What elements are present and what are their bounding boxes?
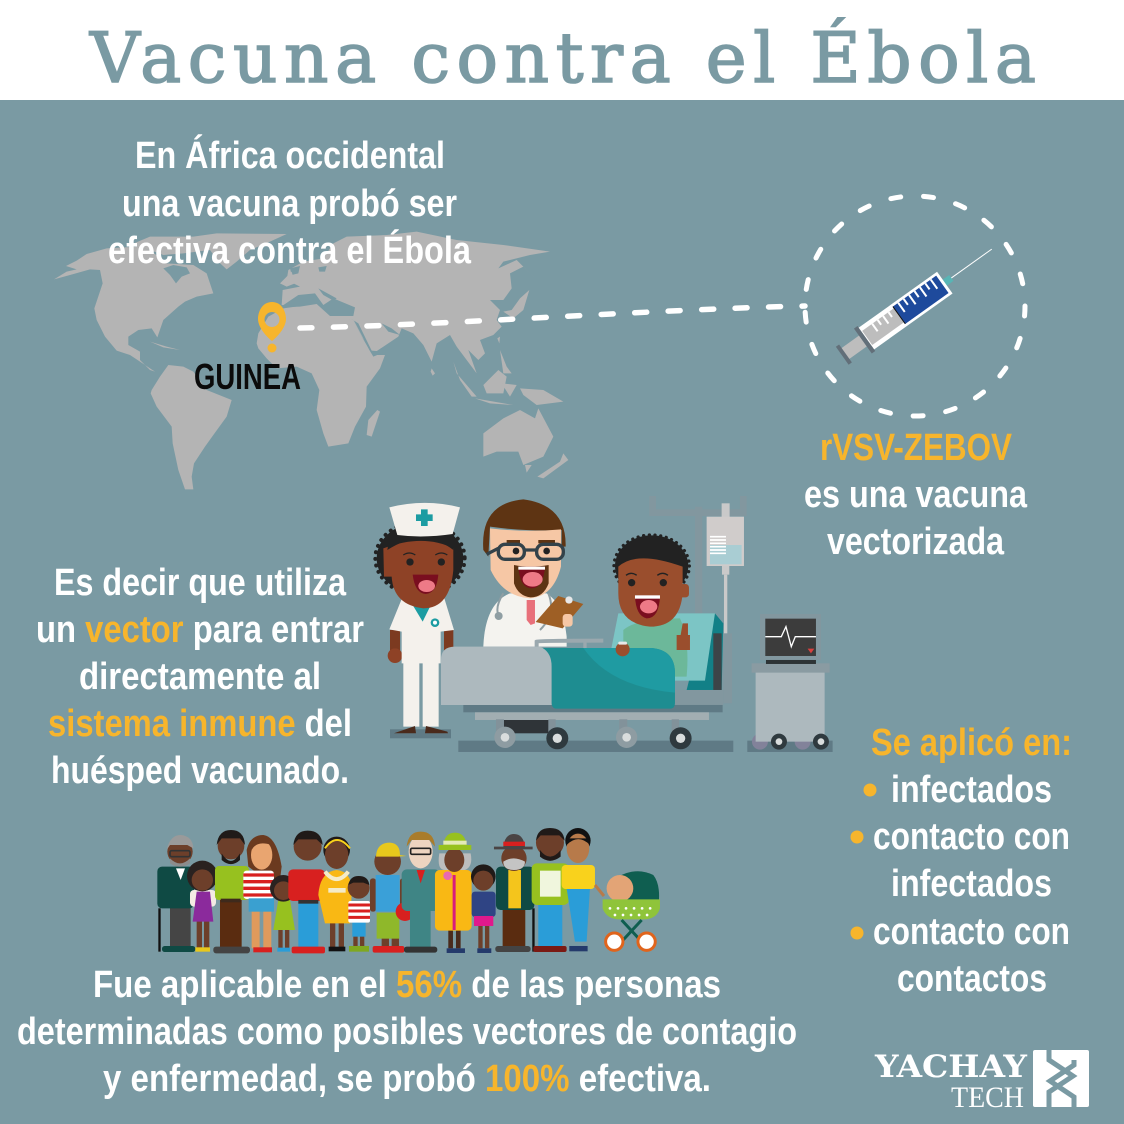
text: se aplicó en: contactos — [897, 958, 1047, 1000]
text: rVSV-ZEBOV: es una vacuna — [804, 474, 1028, 516]
woman in stripes — [243, 835, 282, 952]
illustration: group of people — [157, 828, 660, 953]
heading: Africa occidental: efectiva contra el Ébola — [108, 228, 472, 272]
boy in stripes — [348, 876, 370, 952]
dashed route line — [300, 306, 805, 328]
small girl in green — [270, 875, 297, 952]
text: se aplicó en: contacto con — [873, 816, 1070, 858]
world map — [54, 232, 568, 489]
text: applicability and effectiveness: y enfermedad, se probó 100% efectiva. — [103, 1058, 711, 1100]
text: rVSV-ZEBOV: vectorizada — [827, 521, 1005, 563]
woman in yellow top — [562, 828, 604, 951]
text: applicability and effectiveness — [17, 964, 797, 1100]
hospital illustration — [375, 496, 833, 752]
text: vector explanation: sistema inmune del — [48, 703, 352, 745]
old man with cane — [157, 835, 195, 952]
heading: Africa occidental: una vacuna probó ser — [122, 183, 457, 225]
baby stroller — [603, 871, 660, 950]
text: rVSV-ZEBOV — [804, 427, 1028, 563]
patient — [614, 535, 690, 677]
old woman in yellow coat — [435, 833, 472, 953]
text: vector explanation: Es decir que utiliza — [54, 562, 347, 604]
woman in yellow dress — [318, 837, 352, 951]
icon: dashed circle with syringe — [805, 196, 1025, 416]
monitor — [747, 614, 833, 752]
patient bed head — [605, 613, 732, 703]
text: se aplicó en: infectados — [891, 769, 1052, 811]
text: se aplicó en: infectados — [891, 863, 1052, 905]
heading: Africa occidental: En África occidental — [135, 133, 445, 177]
text: se aplicó en: Se aplicó en: — [871, 722, 1072, 764]
logo: Yachay Tech — [874, 1049, 1089, 1114]
girl in purple — [187, 861, 218, 952]
text: applicability and effectiveness: determinadas como posibles vectores de contagio — [17, 1011, 797, 1053]
doctor — [483, 499, 583, 647]
text: vector explanation: un vector para entrar — [36, 609, 364, 651]
man in green — [213, 830, 250, 953]
logo: Yachay Tech: YACHAY — [874, 1049, 1028, 1085]
title banner — [0, 0, 1124, 100]
girl in navy — [471, 864, 496, 953]
label: Guinea: GUINEA — [194, 356, 301, 397]
text: applicability and effectiveness: Fue aplicable en el 56% de las personas — [93, 964, 721, 1006]
logo: Yachay Tech: TECH — [951, 1081, 1024, 1114]
boy with basketball — [370, 843, 414, 953]
text: se aplicó en: contacto con — [873, 911, 1070, 953]
heading: Africa occidental — [108, 133, 472, 272]
text: se aplicó en — [850, 722, 1072, 1000]
text: vector explanation — [36, 562, 364, 792]
text: vector explanation: huésped vacunado. — [51, 750, 349, 792]
icon: map pin — [258, 302, 286, 352]
man in red — [288, 831, 325, 953]
old man with hat — [494, 834, 535, 952]
title banner: Vacuna contra el Ébola — [89, 17, 1036, 99]
man in green sweater — [532, 828, 569, 952]
text: rVSV-ZEBOV: rVSV-ZEBOV — [820, 427, 1013, 469]
bed — [441, 641, 733, 752]
nurse — [375, 503, 465, 738]
man in teal suit — [402, 832, 440, 953]
text: vector explanation: directamente al — [79, 656, 321, 698]
IV pole — [653, 496, 744, 635]
